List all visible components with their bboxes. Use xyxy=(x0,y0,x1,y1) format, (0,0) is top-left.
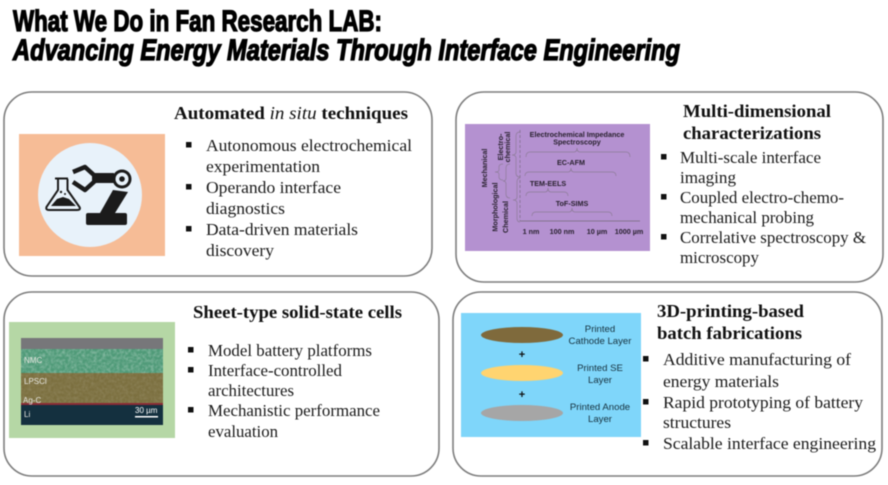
bullet list: Interface-controlled xyxy=(208,361,342,380)
heading: 3D-printing-based xyxy=(657,301,804,321)
chart: techniques by length scale: TEM-EELS xyxy=(530,179,566,188)
bullet list: Correlative spectroscopy & xyxy=(680,228,866,247)
image: cell cross-section micrograph xyxy=(9,322,175,438)
bullet list: Operando interface xyxy=(206,178,341,197)
chart: techniques by length scale xyxy=(465,124,650,251)
image: cell cross-section micrograph: NMC xyxy=(24,356,42,365)
bullet list: structures xyxy=(663,413,731,432)
heading: characterizations xyxy=(683,123,821,143)
chart: techniques by length scale: EC-AFM xyxy=(557,158,585,167)
chart: techniques by length scale: Chemical xyxy=(501,201,510,233)
chart: techniques by length scale: 10 µm xyxy=(587,227,607,236)
image: cell cross-section micrograph: LPSCl xyxy=(24,377,47,386)
bullet list: discovery xyxy=(206,241,275,260)
diagram: printed layers: Printed SE xyxy=(577,363,623,374)
panel: multi-dimensional characterizations xyxy=(456,92,883,282)
chart: techniques by length scale: Morphological xyxy=(490,182,500,232)
diagram: printed layers: + xyxy=(519,349,525,361)
bullet list: Additive manufacturing of xyxy=(663,350,851,369)
bullet list xyxy=(661,148,866,267)
bullet list: Scalable interface engineering xyxy=(663,434,877,453)
panel frame xyxy=(4,292,439,476)
icon: robot arm xyxy=(73,167,132,225)
heading xyxy=(657,301,804,343)
bullet list: energy materials xyxy=(663,372,779,391)
bullet list: imaging xyxy=(680,168,736,187)
chart: techniques by length scale: 100 nm xyxy=(550,227,574,236)
heading: Sheet-type solid-state cells xyxy=(193,302,402,322)
bullet list xyxy=(186,136,412,260)
image: cell cross-section micrograph: Li xyxy=(24,410,30,419)
bullet list xyxy=(188,341,380,441)
chart: techniques by length scale: 1000 µm xyxy=(615,227,643,236)
panel: automated in situ techniques xyxy=(4,92,432,276)
title line 1: What We Do in Fan Research LAB: xyxy=(13,5,382,38)
panel frame xyxy=(456,92,883,282)
heading: Multi-dimensional xyxy=(683,101,831,121)
bullet list: diagnostics xyxy=(206,199,285,218)
heading: batch fabrications xyxy=(657,323,802,343)
bullet list xyxy=(643,350,877,453)
panel frame xyxy=(4,92,432,276)
bullet list: architectures xyxy=(208,381,294,400)
chart: techniques by length scale: Spectroscopy xyxy=(553,138,601,146)
bullet list: experimentation xyxy=(206,157,321,176)
bullet list: Data-driven materials xyxy=(206,220,358,239)
heading: Automated in situ techniques xyxy=(174,103,408,123)
chart: techniques by length scale: ToF-SIMS xyxy=(556,199,589,208)
chart: techniques by length scale: chemical xyxy=(503,132,512,162)
chart: techniques by length scale: Electrochemical Impedance xyxy=(530,130,624,139)
bullet list: mechanical probing xyxy=(680,208,814,227)
diagram: printed layers: Printed xyxy=(585,324,615,335)
diagram: printed layers: + xyxy=(519,389,525,401)
bullet list: Mechanistic performance xyxy=(208,401,380,420)
icon: flask xyxy=(46,178,80,210)
panel frame xyxy=(453,292,882,476)
diagram: printed layers: Layer xyxy=(588,414,613,425)
bullet list: microscopy xyxy=(680,248,759,267)
bullet list: Autonomous electrochemical xyxy=(206,136,412,155)
chart: techniques by length scale: Mechanical xyxy=(480,149,489,187)
title xyxy=(12,5,680,67)
panel: sheet-type solid-state cells xyxy=(4,292,439,476)
bullet list: Model battery platforms xyxy=(208,341,372,360)
bullet list: Multi-scale interface xyxy=(680,148,821,167)
image: robot arm and flask xyxy=(19,134,165,256)
bullet list: Coupled electro-chemo- xyxy=(680,188,844,207)
bullet list: Rapid prototyping of battery xyxy=(663,393,863,412)
image: cell cross-section micrograph: Ag-C xyxy=(23,396,41,405)
image: cell cross-section micrograph: 30 µm xyxy=(135,406,158,415)
diagram: printed layers: Printed Anode xyxy=(570,402,630,413)
chart: techniques by length scale: 1 nm xyxy=(523,227,539,236)
title line 2: Advancing Energy Materials Through Interface Engineering xyxy=(12,34,680,67)
heading xyxy=(683,101,831,143)
diagram: printed layers: Layer xyxy=(588,375,613,386)
diagram: printed layers: Cathode Layer xyxy=(569,336,632,347)
diagram: printed layers xyxy=(461,313,641,437)
bullet list: evaluation xyxy=(208,422,278,441)
panel: 3D-printing-based batch fabrications xyxy=(453,292,882,476)
chart: techniques by length scale: Electro- xyxy=(496,133,505,160)
